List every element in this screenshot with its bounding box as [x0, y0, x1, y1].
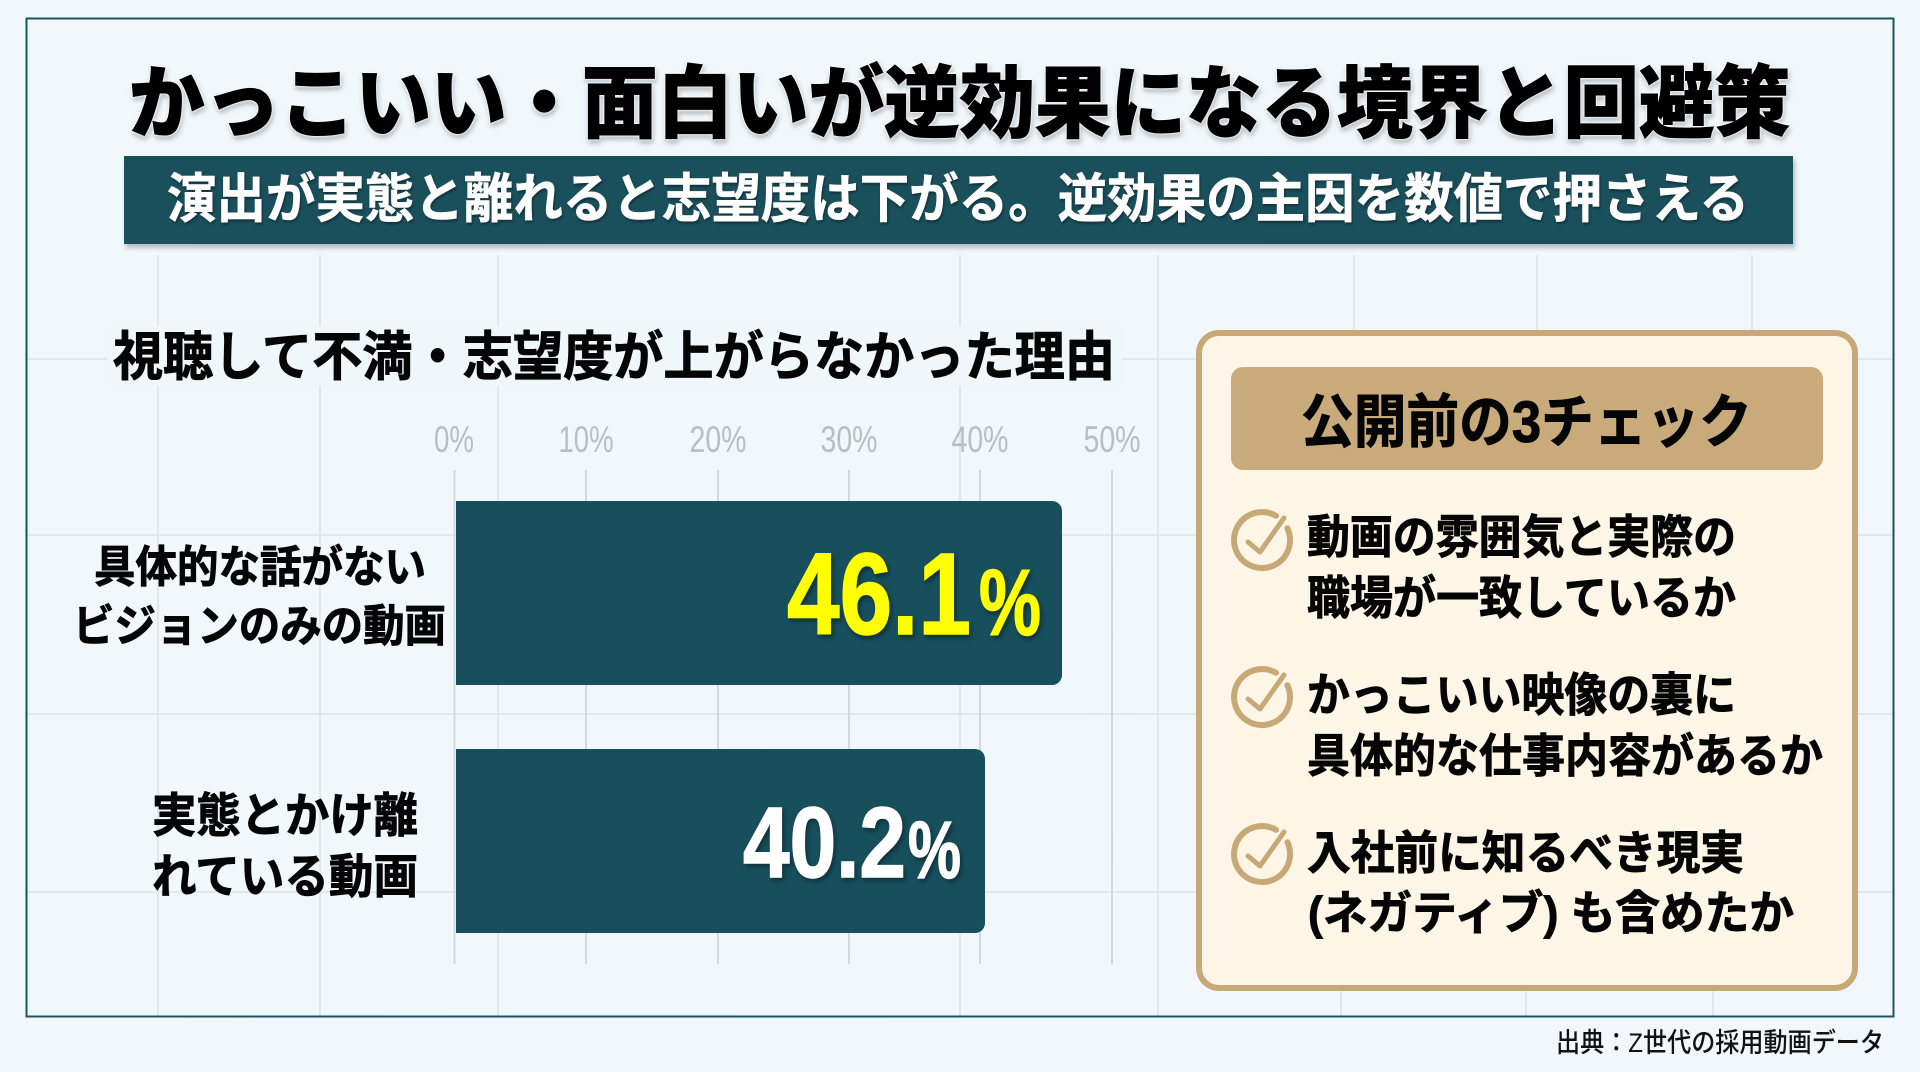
- value 40.2%: 40.2: [743, 787, 906, 899]
- check item 3: 入社前に知るべき現実: [1307, 827, 1744, 879]
- category label 1: ビジョンのみの動画: [73, 602, 446, 651]
- value 46.1%: %: [979, 550, 1041, 655]
- icon: check circle: [1234, 512, 1290, 568]
- axis labels: 10%: [558, 419, 614, 460]
- bar chart: [73, 419, 1140, 964]
- panel header: [1231, 367, 1823, 470]
- subtitle text: 演出が実態と離れると志望度は下がる。逆効果の主因を数値で押さえる: [167, 170, 1749, 229]
- axis labels: [434, 419, 1140, 460]
- category label 1: [73, 543, 446, 651]
- value 46.1%: 46.1: [787, 529, 971, 659]
- axis labels: 40%: [952, 419, 1008, 460]
- axis labels: 30%: [820, 419, 878, 460]
- title: かっこいい・面白いが逆効果になる境界と回避策: [129, 59, 1790, 148]
- source note: 出典：Z世代の採用動画データ: [1556, 1028, 1884, 1058]
- axis labels: 20%: [690, 419, 746, 460]
- subtitle banner: [124, 156, 1793, 244]
- chart heading: 視聴して不満・志望度が上がらなかった理由: [113, 328, 1115, 387]
- axis labels: 50%: [1084, 419, 1140, 460]
- panel: pre-publish checks: [1199, 333, 1855, 988]
- panel heading text: 公開前の3チェック: [1301, 390, 1752, 455]
- check item 3: (ネガティブ) も含めたか: [1308, 887, 1794, 939]
- check item 1: 動画の雰囲気と実際の: [1307, 511, 1736, 563]
- bar: 40.2%: [456, 749, 985, 933]
- category label 1: 具体的な話がない: [94, 543, 426, 592]
- check item 1: 職場が一致しているか: [1307, 572, 1736, 624]
- check item 2: かっこいい映像の裏に: [1307, 669, 1736, 721]
- check item 2: 具体的な仕事内容があるか: [1307, 730, 1823, 782]
- category label 2: [152, 789, 418, 903]
- category label 2: れている動画: [152, 850, 418, 903]
- icon: check circle: [1234, 669, 1290, 725]
- check item 2: [1234, 669, 1823, 782]
- bar: 46.1%: [456, 501, 1062, 685]
- check item 3: [1234, 826, 1794, 939]
- axis labels: 0%: [434, 419, 474, 460]
- icon: check circle: [1234, 826, 1290, 882]
- value 40.2%: %: [908, 806, 961, 896]
- category label 2: 実態とかけ離: [152, 789, 418, 842]
- check item 1: [1234, 511, 1736, 624]
